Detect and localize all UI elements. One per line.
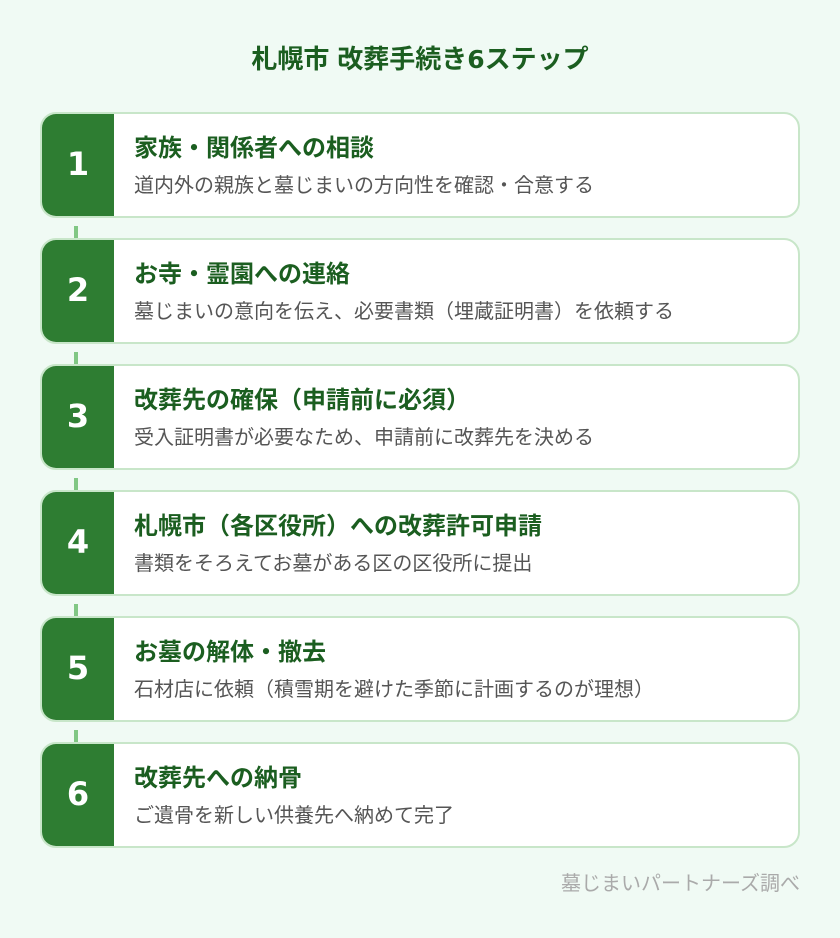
step 3 card (40, 364, 800, 470)
step 5 number: 5 (67, 649, 89, 687)
step 1 description: 道内外の親族と墓じまいの方向性を確認・合意する (134, 169, 594, 198)
step 6 number: 6 (67, 775, 89, 813)
step 1 number (42, 113, 114, 217)
step 2 card (40, 238, 800, 344)
step 2 description: 墓じまいの意向を伝え、必要書類（埋蔵証明書）を依頼する (134, 295, 674, 324)
step 1 number: 1 (67, 145, 89, 183)
step 5 description: 石材店に依頼（積雪期を避けた季節に計画するのが理想） (134, 673, 654, 702)
step 4 heading: 札幌市（各区役所）への改葬許可申請 (134, 506, 542, 541)
step 3 number (42, 365, 114, 469)
step 3 heading: 改葬先の確保（申請前に必須） (134, 380, 470, 415)
step 3 number: 3 (67, 397, 89, 435)
step 4 number: 4 (67, 523, 89, 561)
step 5 card (40, 616, 800, 722)
step 1 heading: 家族・関係者への相談 (134, 128, 374, 163)
step 2 heading: お寺・霊園への連絡 (134, 254, 350, 289)
source note: 墓じまいパートナーズ調べ (561, 867, 800, 896)
connector 1 to 2 (74, 226, 78, 238)
step 5 number (42, 617, 114, 721)
step 4 number (42, 491, 114, 595)
step 6 description: ご遺骨を新しい供養先へ納めて完了 (134, 799, 454, 828)
step 6 heading: 改葬先への納骨 (134, 758, 302, 793)
step 3 description: 受入証明書が必要なため、申請前に改葬先を決める (134, 421, 594, 450)
step 4 card (40, 490, 800, 596)
connector 3 to 4 (74, 478, 78, 490)
step 6 number (42, 743, 114, 847)
connector 5 to 6 (74, 730, 78, 742)
connector 2 to 3 (74, 352, 78, 364)
step 4 description: 書類をそろえてお墓がある区の区役所に提出 (134, 547, 532, 576)
step 1 card (40, 112, 800, 218)
step 6 card (40, 742, 800, 848)
connector 4 to 5 (74, 604, 78, 616)
title: 札幌市 改葬手続き6ステップ (251, 39, 589, 76)
step 5 heading: お墓の解体・撤去 (134, 632, 326, 667)
step 2 number (42, 239, 114, 343)
step 2 number: 2 (67, 271, 89, 309)
